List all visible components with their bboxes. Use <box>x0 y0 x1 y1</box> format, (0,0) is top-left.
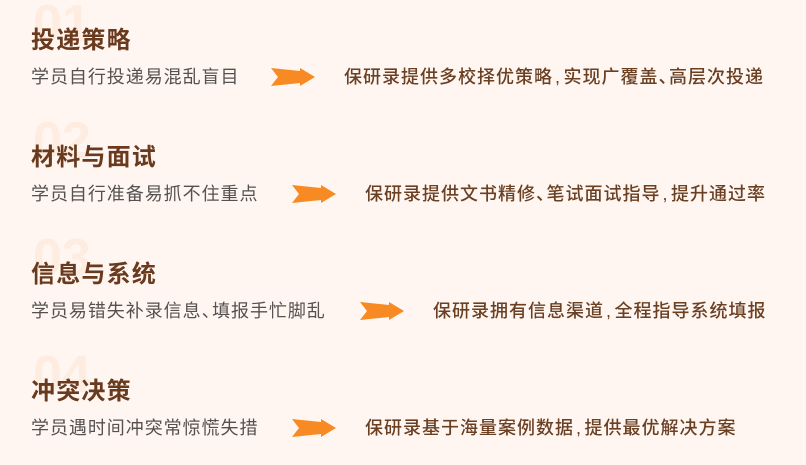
panel: 信息与系统 <box>31 229 766 321</box>
number 02: 02 <box>33 112 91 170</box>
solution text: 、 <box>536 184 554 204</box>
solution text: , <box>662 184 668 204</box>
problem text: 学员自行投递易混乱盲目 <box>31 67 239 87</box>
solution text: 、 <box>658 67 676 87</box>
solution text: 保研录提供文书精修 笔试面试指导 提升通过率 <box>365 184 766 204</box>
solution text: 保研录拥有信息渠道 全程指导系统填报 <box>433 301 766 321</box>
heading: 信息与系统: 信息与系统 <box>31 261 157 288</box>
number 04: 04 <box>33 346 91 404</box>
icon: arrow <box>292 419 336 437</box>
panel: 投递策略 <box>31 0 764 87</box>
solution text: , <box>576 418 581 438</box>
number 03: 03 <box>33 229 91 287</box>
problem text: 学员自行准备易抓不住重点 <box>31 184 258 204</box>
solution text: , <box>555 67 560 87</box>
solution text: 保研录基于海量案例数据 提供最优解决方案 <box>365 418 736 438</box>
icon: arrow <box>271 68 315 86</box>
icon: arrow <box>292 185 336 203</box>
heading: 投递策略: 投递策略 <box>31 27 132 54</box>
problem text: 学员易错失补录信息 填报手忙脚乱 <box>31 301 326 321</box>
solution text: , <box>606 301 611 321</box>
panel: 材料与面试 <box>31 112 766 204</box>
heading: 材料与面试: 材料与面试 <box>31 144 157 171</box>
heading: 冲突决策: 冲突决策 <box>31 378 132 405</box>
problem text: 、 <box>202 301 220 321</box>
problem text: 学员遇时间冲突常惊慌失措 <box>31 418 258 438</box>
panel: 冲突决策 <box>31 346 736 438</box>
solution text: 保研录提供多校择优策略 实现广覆盖 高层次投递 <box>344 67 764 87</box>
icon: arrow <box>360 302 404 320</box>
